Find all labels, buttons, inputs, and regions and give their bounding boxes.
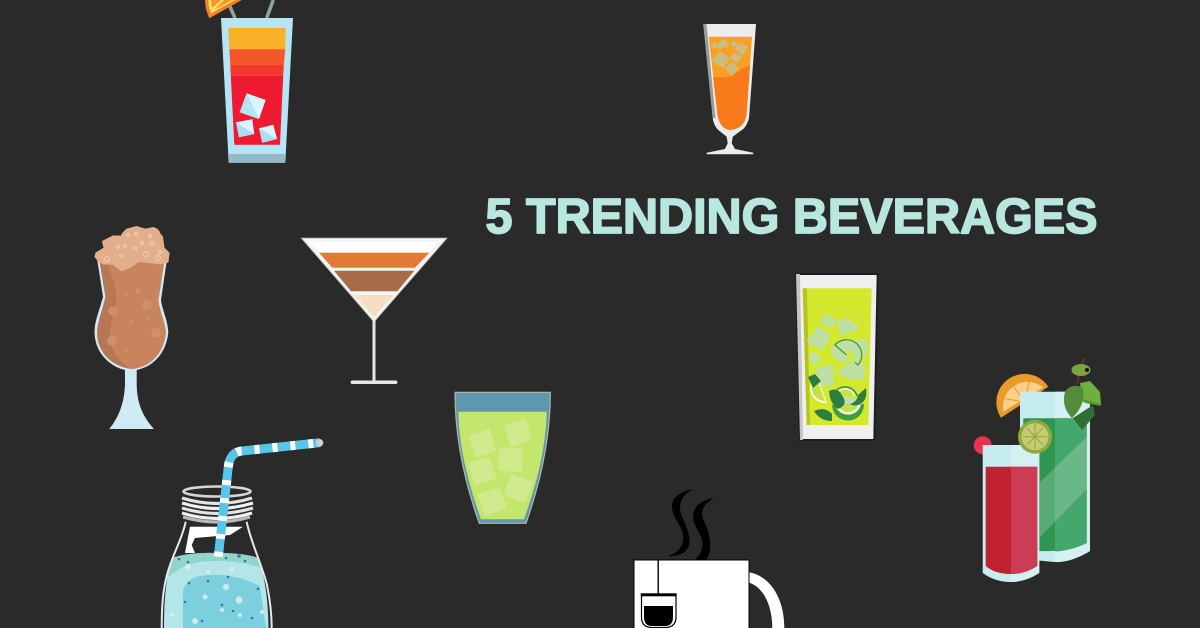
icon: layered red cocktail bbox=[205, 0, 293, 163]
icon: green and red cocktails bbox=[974, 358, 1101, 582]
title: 5 TRENDING BEVERAGES bbox=[486, 190, 1098, 244]
icon: orange pilsner drink bbox=[703, 24, 756, 154]
icon: chocolate float bbox=[95, 227, 168, 429]
icon: blue smoothie bottle with straw bbox=[162, 439, 323, 628]
icon: tea mug with steam bbox=[634, 489, 784, 628]
icon: mojito glass bbox=[796, 274, 878, 440]
icon: martini glass bbox=[302, 238, 447, 384]
icon: green iced drink bbox=[455, 392, 550, 523]
